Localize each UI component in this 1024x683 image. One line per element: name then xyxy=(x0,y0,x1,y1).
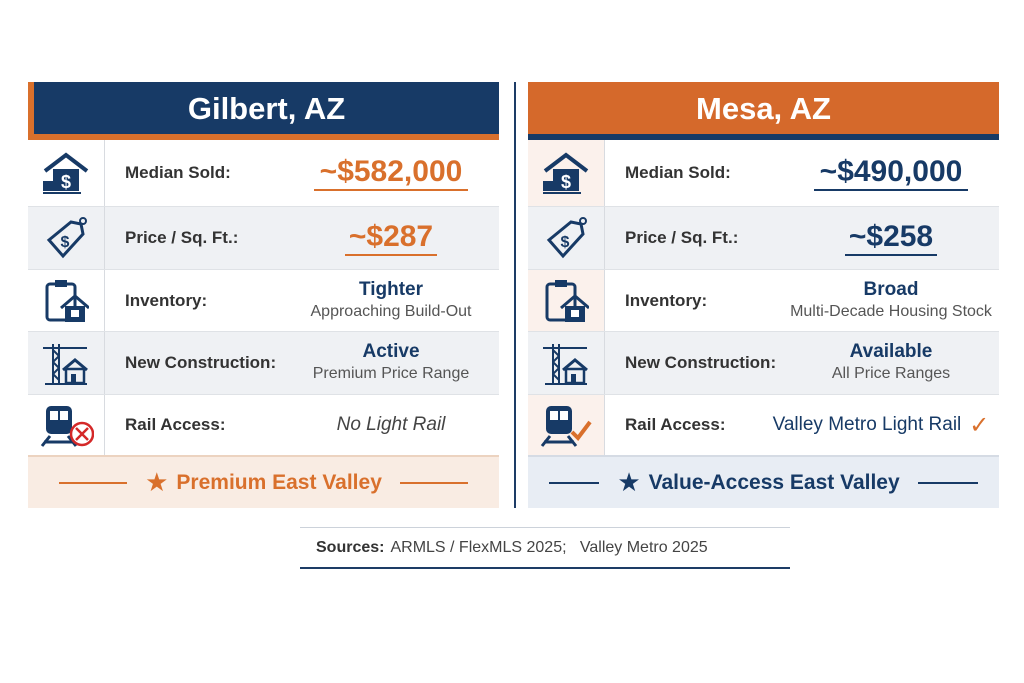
header: Mesa, AZ: Mesa, AZ xyxy=(696,91,831,126)
icon: house dollar: $ xyxy=(561,172,571,192)
value: ~$490,000 xyxy=(820,155,962,188)
value xyxy=(832,341,950,382)
divider line xyxy=(514,82,516,508)
icon: clipboard house xyxy=(28,270,105,331)
row: rail access: Rail Access: xyxy=(125,415,225,434)
row: rail access xyxy=(40,395,446,455)
header: Gilbert, AZ xyxy=(28,82,499,140)
row: rail access: Rail Access: xyxy=(625,415,725,434)
footer: Value-Access East Valley: ★ xyxy=(617,467,641,497)
value xyxy=(772,412,989,438)
header: Gilbert, AZ: Gilbert, AZ xyxy=(188,91,345,126)
icon: crane house xyxy=(528,332,605,394)
sources: Sources: xyxy=(316,538,384,556)
value: Approaching Build-Out xyxy=(310,302,471,320)
footer: Value-Access East Valley xyxy=(528,455,999,508)
value: Valley Metro Light Rail xyxy=(773,414,961,435)
icon: price tag: $ xyxy=(561,234,570,251)
icon: house dollar xyxy=(528,140,605,206)
row: inventory xyxy=(528,270,999,332)
icon: train with check xyxy=(528,395,605,455)
icon: house dollar xyxy=(28,140,105,206)
row: new construction xyxy=(28,332,499,395)
row: new construction: New Construction: xyxy=(625,353,776,372)
icon: price tag xyxy=(528,207,605,269)
icon: clipboard house xyxy=(528,270,605,331)
footer: Premium East Valley: ★ xyxy=(145,467,168,497)
row: new construction: New Construction: xyxy=(125,353,276,372)
value: Available xyxy=(850,341,932,362)
sources: ARMLS / FlexMLS 2025; Valley Metro 2025 xyxy=(390,538,708,556)
value: Broad xyxy=(864,278,918,300)
icon: house dollar: $ xyxy=(61,172,71,192)
footer: Premium East Valley xyxy=(28,455,499,508)
panel: Gilbert xyxy=(28,82,499,508)
row: inventory: Inventory: xyxy=(625,290,707,310)
sources xyxy=(300,527,790,569)
panel: Mesa xyxy=(528,82,999,508)
value: All Price Ranges xyxy=(832,365,950,382)
row: price per sq ft: Price / Sq. Ft.: xyxy=(625,228,738,247)
row: rail access xyxy=(528,395,989,455)
value: Tighter xyxy=(359,278,423,300)
value: ~$287 xyxy=(349,220,433,253)
row: median sold xyxy=(528,140,999,207)
row: inventory: Inventory: xyxy=(125,290,207,310)
row: median sold: Median Sold: xyxy=(625,163,731,182)
header: Mesa, AZ xyxy=(528,82,999,140)
row: median sold: Median Sold: xyxy=(125,163,231,182)
row: median sold xyxy=(28,140,499,207)
icon: crane house xyxy=(28,332,105,394)
icon: train with X xyxy=(28,395,105,455)
footer: Value-Access East Valley: Value-Access East Valley xyxy=(649,470,900,494)
value xyxy=(310,278,472,320)
row: inventory xyxy=(28,270,499,332)
value: Premium Price Range xyxy=(313,365,469,382)
value: ✓ xyxy=(969,412,989,438)
icon: price tag xyxy=(28,207,105,269)
value xyxy=(313,341,469,382)
value: ~$258 xyxy=(849,220,933,253)
row: new construction xyxy=(528,332,999,395)
row: price per sq ft xyxy=(528,207,999,270)
row: price per sq ft: Price / Sq. Ft.: xyxy=(125,228,238,247)
value xyxy=(790,278,992,320)
value: Multi-Decade Housing Stock xyxy=(790,302,992,320)
row: price per sq ft xyxy=(28,207,499,270)
footer: Premium East Valley: Premium East Valley xyxy=(176,470,382,494)
value: Active xyxy=(362,341,420,362)
icon: price tag: $ xyxy=(61,234,70,251)
value: ~$582,000 xyxy=(320,155,462,188)
value: No Light Rail xyxy=(337,414,445,435)
